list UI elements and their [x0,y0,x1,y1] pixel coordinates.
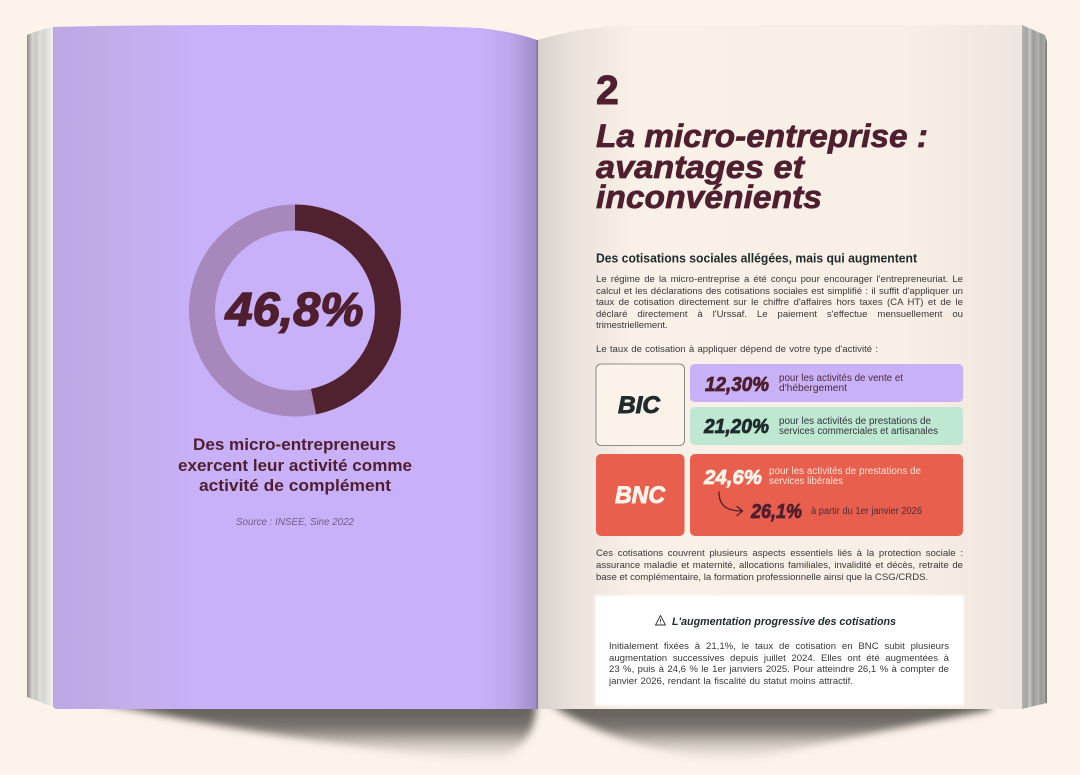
BIC rate: prestations [690,407,963,445]
coverage paragraph: Ces cotisations couvrent plusieurs aspects essentiels liés à la protection sociale : [596,548,963,559]
intro paragraph: trimestriellement. [596,320,668,331]
chapter number: 2 [596,67,619,113]
BIC rate: prestations: services commerciales et artisanales [779,426,938,437]
BIC rate: vente: 12,30% [705,374,769,396]
BNC label box: BNC [615,482,666,509]
BIC label box: BIC [618,392,661,419]
callout text: 23 %, puis à 24,6 % le 1er janviers 2025. Pour atteindre 26,1 % à compter de [609,664,949,675]
right page edges [1022,25,1047,709]
chapter title: avantages et [596,149,805,185]
BNC rates panel: à partir du 1er janvier 2026 [811,506,922,517]
arrow [719,492,742,516]
BNC rates panel: 24,6% [703,467,762,489]
left page edges [27,27,53,707]
callout text: Initialement fixées à 21,1%, le taux de cotisation en BNC subit plusieurs [609,641,949,652]
BIC rate: vente: pour les activités de vente et [779,373,903,384]
BNC label box [596,454,684,536]
BIC label box [596,364,684,446]
coverage paragraph: base et complémentaire, la formation professionnelle ainsi que la CSG/CRDS. [596,572,928,583]
BIC rate: vente [690,364,963,402]
intro paragraph: taux de cotisation directement sur le chiffre d'affaires hors taxes (CA HT) et de le [596,297,963,308]
section heading: Des cotisations sociales allégées, mais qui augmentent [596,252,918,266]
book shadow [105,700,990,762]
donut caption [178,435,412,495]
intro paragraph [596,274,976,334]
icon: warning [656,616,666,625]
left page [53,25,537,709]
intro paragraph: Le régime de la micro-entreprise a été conçu pour encourager l'entrepreneuriat. Le [596,274,963,285]
donut caption: exercent leur activité comme [178,456,412,475]
BIC rate: prestations: pour les activités de prestations de [779,416,931,427]
coverage paragraph: assurance maladie et maternité, allocations familiales, invalidité et décès, retraite de [596,560,963,571]
callout text [609,641,959,691]
right page [538,25,1022,709]
spine [536,40,538,709]
BIC rate: vente: d'hébergement [779,383,847,394]
BIC rate: prestations: 21,20% [703,416,769,438]
donut value: 46,8% [224,284,364,336]
BNC rates panel: 26,1% [750,501,802,523]
BNC rates panel: pour les activités de prestations de [769,466,921,477]
chapter title: inconvénients [596,179,822,215]
coverage paragraph [596,548,976,586]
intro paragraph: déclaré directement à l'Urssaf. Le paiement s'effectue mensuellement ou [596,308,963,320]
donut chart [202,218,388,404]
callout [595,596,964,706]
donut caption: Des micro-entrepreneurs [193,435,396,454]
intro paragraph: calcul et les déclarations des cotisations sociales est simplifié : il suffit d'appliquer un [596,286,963,296]
source: Source : INSEE, Sine 2022 [236,516,354,528]
chapter title: La micro-entreprise : [596,118,928,154]
callout text: augmentation successives depuis juillet 2024. Elles ont été augmentées à [609,652,949,664]
chapter title [596,118,928,215]
callout: L'augmentation progressive des cotisations [672,616,896,628]
rate intro: Le taux de cotisation à appliquer dépend de votre type d'activité : [596,344,878,355]
BNC rates panel [690,454,963,536]
callout text: janvier 2026, rendant la fiscalité du statut moins attractif. [609,676,853,686]
donut caption: activité de complément [199,476,391,495]
BNC rates panel: services libérales [769,476,843,487]
